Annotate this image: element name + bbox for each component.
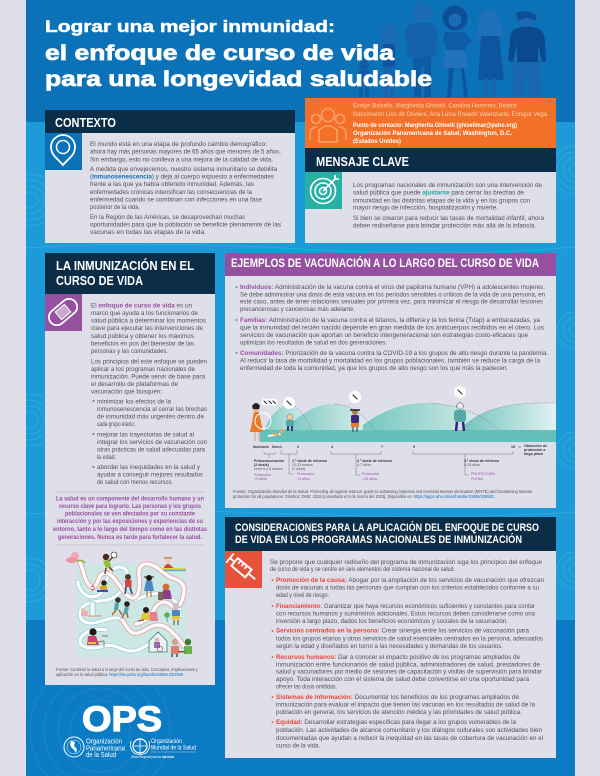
text: consideraciones list: curso de la vida. bbox=[276, 743, 320, 750]
text: enfoque de curso de vida: vacunación que busquen: bbox=[91, 388, 162, 395]
chart dose labels: 4-7 años bbox=[357, 463, 371, 467]
text: authors and contact: Nascimento Lins de Oliveira, Ana Lucia Rosado Valenzuela, Enrique Vega bbox=[353, 111, 547, 118]
title: para una longevidad saludable bbox=[45, 68, 432, 91]
heading: contexto bbox=[45, 110, 295, 133]
logo: Organización Panamericana de la Salud: Panamericana bbox=[86, 746, 125, 752]
text: mensaje clave: mayor riesgo de infección, hospitalización y muerte. bbox=[353, 205, 498, 212]
chart dose labels: PLENA bbox=[471, 477, 483, 481]
text: consideraciones list: población en general, los servicios de atención médica y las prioridades de salud pública. bbox=[276, 709, 522, 716]
chart axis labels: Nacimiento bbox=[253, 445, 270, 449]
icon: bandage bbox=[45, 294, 82, 331]
panel: mensaje clave bbox=[305, 148, 556, 243]
chart brackets bbox=[264, 450, 513, 475]
icon: boy with ball bbox=[103, 552, 117, 574]
logo: Organización Panamericana de la Salud: Organización bbox=[86, 738, 122, 746]
chart axis labels: 1 bbox=[280, 445, 282, 449]
icon: syringe bubbles bbox=[262, 386, 466, 409]
logo: Organización Mundial de la Salud: Organización bbox=[151, 738, 182, 745]
icon: child bbox=[286, 414, 294, 431]
text: ejemplos list bbox=[236, 284, 548, 372]
text: authors and contact: Punto de contacto: Margherita Ghiselli (ghisellmar@paho.org) bbox=[353, 122, 517, 129]
text: mensaje clave: deben rediseñarse para brindar protección más allá de la infancia. bbox=[353, 223, 536, 230]
icon: girl bbox=[350, 409, 360, 432]
text: enfoque de curso de vida bbox=[91, 303, 208, 486]
text: consideraciones list: inmunización para evaluar el impacto que tienen las vacunas en los resultados de salud de la bbox=[276, 702, 535, 709]
text: contexto: A medida que envejecemos, nuestro sistema inmunitario se debilita bbox=[90, 166, 277, 173]
chart dose labels: Protección bbox=[254, 473, 271, 477]
text: consideraciones list: Sistemas de información: Documentar los beneficios de los programas ampliados de bbox=[276, 694, 519, 701]
icon: seated child bbox=[97, 580, 108, 592]
panel: authors bbox=[305, 98, 556, 148]
chart dose labels: PROTECCIÓN bbox=[471, 471, 495, 476]
chart dose labels bbox=[254, 459, 500, 481]
text: consideraciones list: población. Las actividades de alcance comunitario y los diálogos culturales son actividades bien bbox=[276, 727, 542, 734]
source: timeline chart bbox=[233, 489, 533, 499]
chart axis labels: 4 bbox=[331, 445, 333, 449]
text: contexto: vacunas en todas las etapas de la vida. bbox=[90, 229, 206, 236]
chart axis labels: Obtención de bbox=[524, 444, 547, 448]
text: consideraciones list: inversión a largo plazo, dados los beneficios económicos y sociales de la vacunación. bbox=[276, 618, 508, 625]
text: contexto: ahora hay más personas mayores de 65 años que menores de 5 años. bbox=[90, 149, 281, 156]
chart dose labels: (2 años) bbox=[292, 467, 305, 471]
text: authors and contact: Evelyn Balsells, Margherita Ghiselli, Carolina Hommes, Beatriz bbox=[353, 103, 517, 110]
text: consideraciones list: de curso de vida y se centre en seis elementos del sistema nacional de salud. bbox=[270, 566, 455, 573]
source: illustration: aplicación en la salud pública. https://iris.paho.org/handle/10665.2/53368 bbox=[56, 672, 183, 677]
text: enfoque de curso de vida: el desarrollo de plataformas de bbox=[91, 381, 178, 388]
text: enfoque de curso de vida: marco que ayuda a los funcionarios de bbox=[91, 310, 198, 317]
text: enfoque de curso de vida: abordar las inequidades en la salud y bbox=[97, 464, 201, 471]
text: mensaje clave: inmunidad en las distintas etapas de la vida y en los grupos con bbox=[353, 197, 530, 204]
text: consideraciones list: Financiamiento: Garantizar que haya recursos económicos suficientes y constantes para contar bbox=[276, 603, 536, 610]
text: ejemplos list: enfermedad de toda la comunidad, ya que los grupos de alto riesgo son los que más la padecen. bbox=[240, 365, 508, 372]
chart dose labels: (2 dosis) bbox=[254, 463, 270, 467]
text: consideraciones list: salud y vacunadores por medio de sesiones de capacitación y visitas de supervisión para brindar bbox=[276, 669, 543, 676]
figure: small child bbox=[358, 60, 370, 97]
figure: girl bbox=[377, 23, 401, 97]
maze blue paths bbox=[78, 563, 184, 651]
text: enfoque de curso de vida: salud pública a determinar los momentos bbox=[91, 318, 207, 325]
text: consideraciones list: documentadas que ayudan a reducir la inequidad en las tasas de cobertura de vacunación en el bbox=[276, 735, 544, 742]
text: consideraciones list: según la edad y diseñados en torno a las necesidades y demandas de los usuarios. bbox=[276, 643, 503, 650]
icon: group of people bbox=[310, 108, 346, 142]
logo: Organización Mundial de la Salud bbox=[130, 738, 196, 759]
icon: pregnant mother bbox=[250, 403, 271, 441]
maze pink main path bbox=[80, 563, 184, 646]
callout: salud y desarrollo humano: poblacionales se ven afectados por su constante bbox=[65, 511, 195, 518]
illustration: silhouettes of people across ages bbox=[358, 2, 546, 97]
icon: wheelchair in house bbox=[149, 632, 167, 652]
icon: plant bbox=[164, 612, 170, 622]
text: enfoque de curso de vida: de inmunidad más urgentes dentro de bbox=[97, 413, 204, 420]
text: ejemplos list: este caso, antes de tener relaciones sexuales por primera vez, para minimizar el riesgo de desarrollar lesiones bbox=[240, 298, 544, 306]
text: consideraciones list: apoyo. Toda interacción con el sistema de salud debe convertirse en una oportunidad para bbox=[276, 676, 529, 683]
chart dose labels: <3 años bbox=[297, 477, 310, 481]
text: enfoque de curso de vida: de salud con menos recursos. bbox=[97, 479, 173, 486]
icon: baby bbox=[66, 552, 85, 563]
text: authors and contact bbox=[353, 103, 547, 145]
panel: contexto bbox=[45, 110, 295, 243]
icon: baby crawling bbox=[268, 429, 284, 437]
title bbox=[45, 17, 432, 91]
panel: la inmunización en el curso de vida bbox=[45, 253, 215, 685]
heading: ejemplos bbox=[225, 253, 556, 276]
heading: consideraciones: DE VIDA EN LOS PROGRAMAS NACIONALES DE INMUNIZACIÓN bbox=[235, 533, 522, 546]
callout: salud y desarrollo humano: interacción y por las exposiciones y experiencias de su bbox=[57, 518, 203, 525]
heading: consideraciones: CONSIDERACIONES PARA LA APLICACIÓN DEL ENFOQUE DE CURSO bbox=[235, 521, 539, 534]
heading: consideraciones bbox=[225, 517, 556, 551]
chart dose labels: Protección bbox=[362, 472, 379, 476]
icon: teen bbox=[125, 574, 132, 594]
text: consideraciones list: ofrecer las dosis omitidas. bbox=[276, 683, 337, 690]
text: contexto: En la Región de las Américas, se desaprovechan muchas bbox=[90, 214, 246, 221]
icon: woman standing bbox=[144, 575, 154, 597]
text: consideraciones list: con recursos humanos y suministros adicionales. Estos recursos deben considerarse como una bbox=[276, 611, 535, 618]
chart dose labels: Protección bbox=[297, 472, 314, 476]
chart axis labels: 7 bbox=[381, 445, 383, 449]
text: authors and contact: (Estados Unidos) bbox=[353, 138, 401, 145]
chart axis labels: Sem. bbox=[272, 445, 281, 449]
text: consideraciones list bbox=[270, 559, 544, 750]
icon: target bbox=[305, 172, 342, 209]
figure: man bbox=[405, 2, 437, 97]
heading: mensaje clave bbox=[305, 148, 556, 172]
text: consideraciones list: Recursos humanos: Dar a conocer el impacto positivo de los programas ampliados de bbox=[276, 654, 520, 661]
logo: Organización Mundial de la Salud: Mundial de la Salud bbox=[151, 744, 196, 752]
icon: syringe bbox=[225, 551, 262, 588]
text: enfoque de curso de vida: salud pública y obtener los máximos bbox=[91, 333, 195, 340]
text: mensaje clave: salud pública que puede ajustarse para cerrar las brechas de bbox=[353, 190, 524, 197]
text: mensaje clave bbox=[353, 182, 544, 230]
text: consideraciones list: inmunización entre funcionarios de salud pública, administradores de salud, prestadores de bbox=[276, 662, 540, 668]
icon: adolescent bbox=[454, 403, 466, 431]
text: ejemplos list: que la inmunidad del recién nacido depende en gran medida de los anticuerpos recibidos en el útero. Los bbox=[240, 324, 545, 331]
chart dose labels: 3.ª dosis de refuerzo bbox=[464, 459, 500, 463]
text: contexto: posterior de la vida. bbox=[90, 204, 140, 211]
heading: contexto: CONTEXTO bbox=[55, 115, 116, 130]
icon: woman kneeling with child bbox=[138, 607, 158, 621]
panel: consideraciones bbox=[225, 517, 556, 758]
text: contexto: (inmunosenescencia) y deja al cuerpo expuesto a enfermedades bbox=[90, 174, 275, 181]
chart hills bbox=[260, 403, 556, 442]
heading: ejemplos: EJEMPLOS DE VACUNACIÓN A LO LARGO DEL CURSO DE VIDA bbox=[231, 255, 539, 270]
chart axis labels: 15 bbox=[511, 445, 515, 449]
callout: salud y desarrollo humano: La salud es un componente del desarrollo humano y un bbox=[56, 496, 204, 503]
text: enfoque de curso de vida: Los principios del este enfoque se pueden bbox=[91, 358, 207, 365]
text: contexto: enfermedad cuando se combinan con infecciones en una fase bbox=[90, 196, 262, 203]
text: contexto: Sin embargo, esto no conlleva a una mejora de la calidad de vida. bbox=[90, 156, 273, 163]
chart axis labels: protección a bbox=[524, 448, 546, 452]
callout: salud y desarrollo humano bbox=[53, 496, 207, 541]
text: enfoque de curso de vida: inmunización. Puede servir de base para bbox=[91, 373, 205, 380]
text: enfoque de curso de vida: integrar los servicios de vacunación con bbox=[97, 439, 207, 446]
chart: vaccination timeline bbox=[250, 386, 556, 481]
chart dose labels: <18 años bbox=[362, 477, 377, 481]
chart dose labels: 12-23 meses bbox=[292, 463, 313, 467]
text: consideraciones list: Se propone que cualquier rediseño del programa de inmunización siga los principios del enfoque bbox=[270, 559, 542, 566]
icon: red question mark bbox=[91, 586, 94, 591]
chart dose labels: entre 6 y 8 meses bbox=[254, 467, 283, 471]
text: consideraciones list: Promoción de la causa: Abogar por la ampliación de los servicios de vacunación que ofrezcan bbox=[276, 577, 544, 584]
text: consideraciones list: dosis de vacunas a todas las personas que cumplan con los criterios establecidos conforme a su bbox=[276, 585, 539, 592]
text: ejemplos list: servicios de vacunación que aportan un beneficio intergeneracional son estrategias costo-eficaces que bbox=[240, 332, 528, 339]
chart axis labels: 2 bbox=[297, 445, 299, 449]
chart axis labels: largo plazo bbox=[524, 452, 544, 456]
icon: hospital bed bbox=[81, 602, 102, 616]
source: timeline chart: Fuente: Organización Mundial de la Salud. Protecting all against tetanus: guide to sustaining maternal and neonatal tetanus elimination (MNTE) and broadening tetanus bbox=[233, 489, 533, 494]
callout: salud y desarrollo humano: recurso clave para lograrlo. Las personas y los grupos bbox=[59, 503, 201, 510]
icon: location pin bbox=[45, 133, 82, 170]
text: ejemplos list: Comunidades: Priorización de la vacuna contra la COVID-19 a los grupos de alto riesgo durante la pandemia. bbox=[240, 350, 548, 357]
text: ejemplos list: precancerosas y cancerosas más adelante. bbox=[240, 306, 355, 313]
source: timeline chart: protection for all populations. Ginebra: OMS; 2019 [consultado el 9 de marzo del 2023]. Disponible en: https://apps.who.int/iris/handle/10665/329882. bbox=[233, 494, 495, 499]
chart dose labels: Primovacunación bbox=[254, 459, 284, 463]
text: enfoque de curso de vida: clave para ejecutar las intervenciones de bbox=[91, 325, 203, 332]
text: enfoque de curso de vida: beneficios en pos del bienestar de las bbox=[91, 341, 195, 348]
text: enfoque de curso de vida: minimizar los efectos de la bbox=[97, 398, 171, 405]
text: ejemplos list: Al reducir la tasa de morbilidad y mortalidad en los grupos poblacionales, también se reduce la carga de la bbox=[240, 358, 540, 365]
icon: elderly standing bbox=[172, 603, 180, 625]
text: ejemplos list: optimizan los resultados de salud en dos generaciones. bbox=[240, 340, 387, 347]
title: Lograr una mejor inmunidad: bbox=[45, 17, 335, 36]
illustration: life course maze bbox=[66, 552, 192, 657]
text: enfoque de curso de vida: la edad; bbox=[97, 454, 116, 461]
source: illustration: Fuente: Construir la salud a lo largo del curso de vida. Conceptos, implicaciones y bbox=[56, 667, 199, 672]
text: mensaje clave: Los programas nacionales de inmunización son una intervención de bbox=[353, 182, 542, 189]
icon: elderly couple at table bbox=[171, 639, 192, 657]
text: consideraciones list: Servicios centrados en la persona: Crear sinergia entre los servicios de vacunación para bbox=[276, 628, 529, 635]
text: consideraciones list: todos los grupos etarios y otros servicios de salud esenciales centrados en la persona, adecuados bbox=[276, 636, 544, 642]
chart dose labels: <3 años bbox=[254, 477, 267, 481]
text: consideraciones list: edad y nivel de riesgo. bbox=[276, 592, 329, 599]
heading: mensaje clave: MENSAJE CLAVE bbox=[316, 154, 409, 169]
icon: couple bbox=[112, 597, 130, 618]
text: consideraciones list: Equidad: Desarrollar estrategias específicas para llegar a los grupos vulnerables de la bbox=[276, 719, 516, 726]
chart dose labels: 2.ª dosis de refuerzo bbox=[357, 459, 393, 463]
text: contexto bbox=[90, 141, 282, 236]
text: ejemplos list: Individuos: Administración de la vacuna contra el virus del papiloma humano (VPH) a adolescentes mujeres. bbox=[240, 284, 545, 291]
heading: la inmunización: LA INMUNIZACIÓN EN EL bbox=[56, 258, 194, 273]
text: contexto: enfermedades crónicas intensifican las consecuencias de la bbox=[90, 189, 252, 196]
icon: woman at table bbox=[158, 584, 172, 600]
text: enfoque de curso de vida: El enfoque de curso de vida es un bbox=[91, 303, 192, 310]
text: contexto: El mundo está en una etapa de profundo cambio demográfico: bbox=[90, 141, 267, 148]
figure: curly-haired woman bbox=[442, 6, 472, 97]
chart axis labels: 9 bbox=[413, 445, 415, 449]
text: authors and contact: Organización Panamericana de Salud, Washington, D.C. bbox=[353, 130, 512, 137]
figure: long-haired woman bbox=[475, 10, 505, 97]
text: enfoque de curso de vida: mejorar las trayectorias de salud al bbox=[97, 431, 195, 438]
text: enfoque de curso de vida: inmunosenescencia al cerrar las brechas bbox=[97, 406, 208, 413]
text: enfoque de curso de vida: otras prácticas de salud adecuadas para bbox=[97, 447, 205, 454]
text: enfoque de curso de vida: cada grupo etario; bbox=[97, 421, 135, 428]
callout: salud y desarrollo humano: entorno, tanto a lo largo del tiempo como en las distintas bbox=[53, 526, 207, 533]
heading: la inmunización bbox=[45, 253, 215, 294]
text: ejemplos list: Familias: Administración de la vacuna contra el tétanos, la difteria y la tos ferina (Tdap) a embarazadas, ya bbox=[240, 317, 540, 324]
chart axis labels bbox=[253, 444, 547, 456]
text: enfoque de curso de vida: personas y las comunidades. bbox=[91, 348, 168, 355]
figure: older man bbox=[508, 11, 546, 97]
text: contexto: oportunidades para que la población se beneficie plenamente de las bbox=[90, 222, 282, 229]
logo: OPS: OPS bbox=[82, 700, 162, 739]
heading: la inmunización: CURSO DE VIDA bbox=[56, 274, 143, 288]
text: mensaje clave: Si bien se crearon para reducir las tasas de mortalidad infantil, ahora bbox=[353, 215, 544, 222]
logo: Organización Panamericana de la Salud: de la Salud bbox=[86, 752, 116, 759]
chart dose labels: 1.ª dosis de refuerzo bbox=[292, 459, 328, 463]
logo: Organización Mundial de la Salud: Oficina Regional para las Américas bbox=[131, 755, 174, 759]
text: enfoque de curso de vida: aplicar a los programas nacionales de bbox=[91, 366, 195, 373]
panel: ejemplos de vacunación bbox=[225, 253, 556, 508]
source: illustration bbox=[56, 667, 199, 677]
logo: Organización Panamericana de la Salud bbox=[64, 737, 125, 759]
icon: beach woman bbox=[163, 557, 186, 571]
callout: salud y desarrollo humano: generaciones. Nunca es tarde para fortalecer la salud. bbox=[58, 534, 202, 541]
chart dose labels: 9-15 años bbox=[464, 463, 480, 467]
text: enfoque de curso de vida: ayudar a conseguir mejores resultados bbox=[97, 472, 204, 479]
text: contexto: frente a las que ya había obtenido inmunidad. Además, las bbox=[90, 181, 255, 188]
title: el enfoque de curso de vida bbox=[45, 42, 394, 65]
icon: woman with laptop bbox=[87, 628, 108, 647]
text: ejemplos list: Se debe administrar una dosis de esta vacuna en los períodos sensibles o críticos de la vida de una persona, en bbox=[240, 292, 545, 298]
